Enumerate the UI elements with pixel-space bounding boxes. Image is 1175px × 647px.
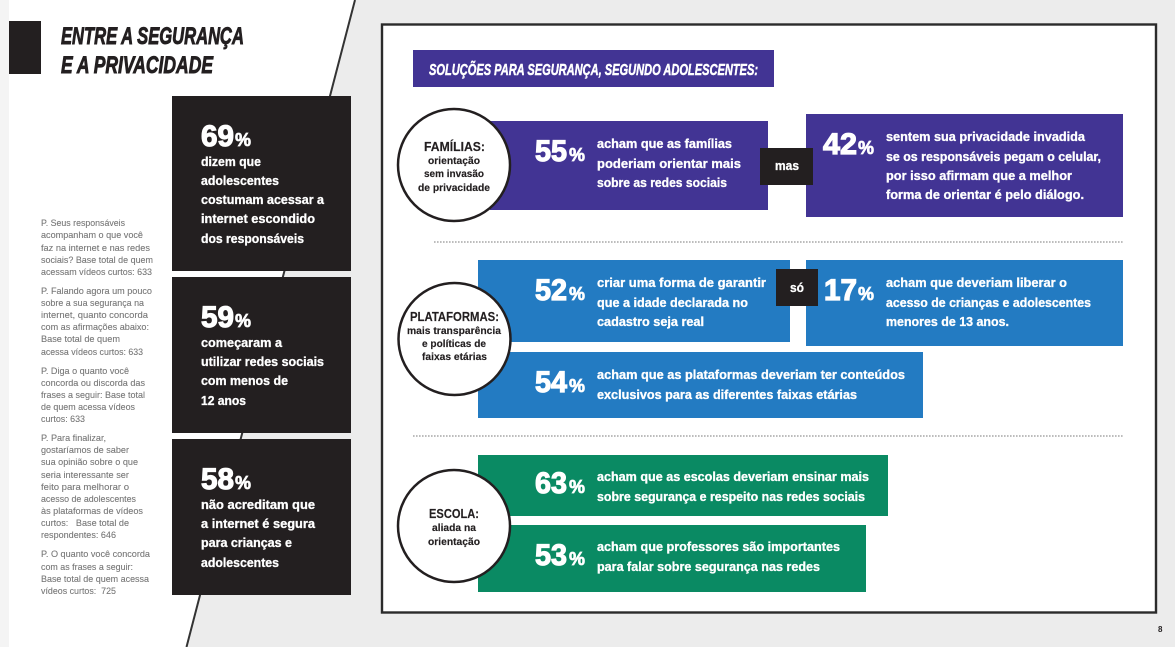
bar: plataformas 17%: %	[858, 284, 874, 304]
footnotes: sociais? Base total de quem	[41, 255, 153, 265]
bar: plataformas 52%: %	[569, 284, 585, 304]
bar: plataformas 52%: criar uma forma de garantir	[597, 276, 766, 290]
number 59%	[201, 301, 251, 334]
bar: famílias 42%: 42	[823, 128, 857, 161]
footnotes: acessa vídeos curtos: 633	[41, 347, 143, 357]
footnotes: respondentes: 646	[41, 530, 116, 540]
footnotes: concorda ou discorda das	[41, 378, 145, 388]
footnotes: curtos: Base total de	[41, 518, 129, 528]
title	[61, 23, 244, 79]
bar: famílias 42%	[806, 114, 1123, 217]
title: ENTRE A SEGURANÇA	[61, 23, 244, 50]
footnotes: acesso de adolescentes	[41, 494, 136, 504]
footnotes: P. O quanto você concorda	[41, 549, 150, 559]
bar: plataformas 52%: que a idade declarada no	[597, 296, 748, 310]
footnotes: feito para melhorar o	[41, 482, 129, 492]
bar: escola 63%	[478, 455, 888, 516]
heading: soluções: SOLUÇÕES PARA SEGURANÇA, SEGUNDO ADOLESCENTES:	[429, 59, 758, 79]
bar: famílias 42%: se os responsáveis pegam o celular,	[886, 150, 1101, 164]
footnotes: sua opinião sobre o que	[41, 457, 138, 467]
bar: plataformas 54%: 54	[535, 366, 567, 399]
circle: famílias: orientação	[428, 155, 480, 167]
number 59%: %	[235, 311, 251, 331]
connector: só: só	[790, 281, 804, 295]
bar: famílias 55%: poderiam orientar mais	[597, 157, 741, 171]
bar: plataformas 54%: acham que as plataformas deveriam ter conteúdos	[597, 368, 905, 382]
bar: famílias 55%	[490, 121, 768, 210]
text 58%: para crianças e	[201, 536, 292, 550]
bar: escola 53%: para falar sobre segurança nas redes	[597, 560, 820, 574]
circle: plataformas: faixas etárias	[422, 351, 487, 363]
footnotes: curtos: 633	[41, 414, 85, 424]
bar: plataformas 52%	[478, 260, 790, 342]
bar: famílias 42%: por isso afirmam que a melhor	[886, 169, 1072, 183]
footnotes: P. Para finalizar,	[41, 433, 106, 443]
bar: famílias 55%: %	[569, 145, 585, 165]
panel: stat 59%	[172, 277, 351, 433]
number 69%: 69	[201, 120, 234, 153]
bar: escola 63%: sobre segurança e respeito nas redes sociais	[597, 490, 865, 504]
bar: plataformas 17%: 17	[824, 274, 857, 307]
circle: plataformas: e políticas de	[422, 338, 486, 350]
heading: soluções	[413, 50, 774, 87]
left white page area with diagonal edge	[9, 0, 355, 647]
bar: famílias 42%: %	[858, 138, 874, 158]
circle: famílias: FAMÍLIAS:	[424, 139, 485, 154]
circle: famílias	[398, 109, 510, 221]
circle: famílias: de privacidade	[418, 182, 490, 194]
footnotes: frases a seguir: Base total	[41, 390, 145, 400]
footnotes: vídeos curtos: 725	[41, 586, 116, 596]
footnotes: P. Seus responsáveis	[41, 218, 125, 228]
circle: escola: orientação	[428, 536, 480, 548]
bar: plataformas 17%	[806, 260, 1123, 346]
footnotes: sobre a sua segurança na	[41, 298, 144, 308]
circle: plataformas	[398, 283, 510, 395]
panel: stat 58%	[172, 439, 351, 595]
footnotes: de quem acessa vídeos	[41, 402, 135, 412]
bar: escola 53%: 53	[535, 539, 567, 572]
bar: escola 53%: %	[569, 549, 585, 569]
text 59%: com menos de	[201, 374, 288, 388]
text 69%: costumam acessar a	[201, 193, 325, 207]
number 69%: %	[235, 130, 251, 150]
text 59%: 12 anos	[201, 394, 246, 408]
footnotes: às plataformas de vídeos	[41, 506, 144, 516]
bar: famílias 42%: forma de orientar é pelo diálogo.	[886, 188, 1084, 202]
footnotes: com as afirmações abaixo:	[41, 322, 149, 332]
footnotes: gostaríamos de saber	[41, 445, 129, 455]
bar: plataformas 52%: 52	[535, 274, 567, 307]
panel: stat 69%	[172, 96, 351, 271]
bar: plataformas 52%: cadastro seja real	[597, 315, 704, 329]
circle: plataformas: PLATAFORMAS:	[410, 309, 499, 324]
circle: escola	[398, 470, 510, 582]
footnotes: faz na internet e nas redes	[41, 243, 151, 253]
bar: escola 53%: acham que professores são importantes	[597, 540, 840, 554]
bar: famílias 55%: acham que as famílias	[597, 137, 732, 151]
text 69%	[201, 155, 325, 246]
title: E A PRIVACIDADE	[61, 52, 214, 79]
number 59%: 59	[201, 301, 234, 334]
bar: plataformas 17%: acham que deveriam liberar o	[886, 276, 1067, 290]
number 58%: %	[235, 473, 251, 493]
bar: famílias 55%: 55	[535, 135, 567, 168]
bar: escola 63%: 63	[535, 467, 567, 500]
text 58%: adolescentes	[201, 556, 279, 570]
bar: escola 63%: acham que as escolas deveriam ensinar mais	[597, 470, 869, 484]
bar: plataformas 54%: %	[569, 376, 585, 396]
footnotes	[41, 218, 153, 596]
footnotes: P. Falando agora um pouco	[41, 286, 152, 296]
text 58%	[201, 498, 316, 570]
circle: plataformas: mais transparência	[407, 325, 501, 337]
text 69%: adolescentes	[201, 174, 279, 188]
page number: 8	[1158, 625, 1163, 634]
text 59%: começaram a	[201, 336, 283, 350]
number 58%: 58	[201, 463, 234, 496]
number 69%	[201, 120, 251, 153]
circle: famílias: sem invasão	[424, 168, 484, 180]
footnotes: com as frases a seguir:	[41, 562, 133, 572]
text 59%: utilizar redes sociais	[201, 355, 324, 369]
footnotes: seria interessante ser	[41, 470, 129, 480]
text 58%: a internet é segura	[201, 517, 316, 531]
text 59%	[201, 336, 324, 408]
title block marker	[9, 21, 41, 74]
bar: plataformas 17%: menores de 13 anos.	[886, 315, 1009, 329]
footnotes: Base total de quem	[41, 334, 120, 344]
number 58%	[201, 463, 251, 496]
connector: mas	[760, 148, 813, 185]
bar: famílias 55%: sobre as redes sociais	[597, 176, 727, 190]
bar: plataformas 54%: exclusivos para as diferentes faixas etárias	[597, 388, 857, 402]
text 69%: internet escondido	[201, 212, 315, 226]
bar: plataformas 54%	[478, 352, 923, 418]
footnotes: internet, quanto concorda	[41, 310, 148, 320]
text 58%: não acreditam que	[201, 498, 315, 512]
footnotes: Base total de quem acessa	[41, 574, 149, 584]
circle: escola: aliada na	[432, 522, 476, 534]
footnotes: acompanham o que você	[41, 230, 143, 240]
circle: escola: ESCOLA:	[429, 506, 479, 521]
panel: soluções	[382, 24, 1156, 612]
connector: mas: mas	[775, 159, 799, 173]
footnotes: P. Diga o quanto você	[41, 366, 129, 376]
bar: escola 63%: %	[569, 477, 585, 497]
bar: famílias 42%: sentem sua privacidade invadida	[886, 130, 1086, 144]
text 69%: dizem que	[201, 155, 261, 169]
footnotes: acessam vídeos curtos: 633	[41, 267, 152, 277]
connector: só	[776, 269, 818, 306]
bar: escola 53%	[478, 525, 866, 592]
bar: plataformas 17%: acesso de crianças e adolescentes	[886, 296, 1091, 310]
text 69%: dos responsáveis	[201, 232, 304, 246]
